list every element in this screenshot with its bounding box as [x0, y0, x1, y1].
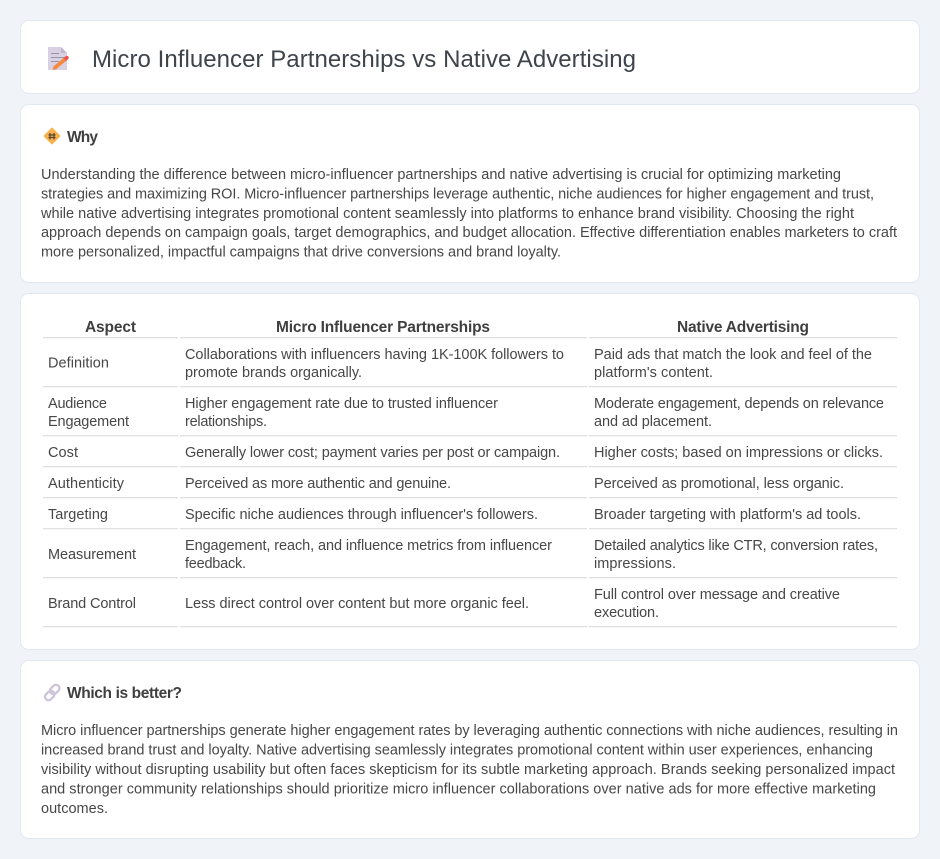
- text block: which is better paragraph: outcomes.: [41, 801, 108, 817]
- table row: brand control: Less direct control over content but more organic feel.: [185, 596, 529, 612]
- table row: definition: Definition: [48, 356, 109, 372]
- table row: cost: Higher costs; based on impressions or clicks.: [594, 445, 883, 461]
- table row: brand control: Brand Control: [48, 596, 136, 612]
- table row: audience engagement: and ad placement.: [594, 414, 712, 430]
- table row: definition: [43, 347, 897, 387]
- icon: diamond sign: [44, 128, 60, 144]
- table row: authenticity: [43, 476, 897, 498]
- table header row: Aspect: [85, 319, 136, 336]
- table header row: [43, 319, 897, 338]
- table row: audience engagement: Higher engagement rate due to trusted influencer: [185, 396, 498, 412]
- text block: why paragraph: more personalized, impactful campaigns that drive conversions and brand loyalty.: [41, 244, 561, 260]
- icon: chain link: [44, 683, 61, 702]
- panel: why: [20, 104, 920, 282]
- table row: authenticity: Perceived as promotional, less organic.: [594, 476, 844, 492]
- title: Micro Influencer Partnerships vs Native Advertising: [92, 46, 636, 73]
- panel: which is better: [20, 660, 920, 838]
- table row: targeting: Broader targeting with platform's ad tools.: [594, 507, 861, 523]
- table row: audience engagement: Audience: [48, 396, 107, 412]
- table row: definition: promote brands organically.: [185, 365, 362, 381]
- table row: authenticity: Perceived as more authentic and genuine.: [185, 476, 451, 492]
- table row: measurement: [43, 538, 897, 578]
- heading: which is better: Which is better?: [67, 685, 182, 702]
- heading: why: Why: [67, 129, 98, 146]
- table row: measurement: feedback.: [185, 556, 246, 572]
- table header row: Micro Influencer Partnerships: [276, 319, 490, 336]
- icon: document with pencil: [48, 47, 69, 70]
- text block: why paragraph: while native advertising integrates promotional content seamlessly into platforms to enhance brand visibility. Choosing the right: [40, 206, 854, 222]
- text block: why paragraph: approach depends on campaign goals, target demographics, and budget allocation. Effective differentiation enables marketers to craft: [41, 225, 897, 241]
- table row: cost: Cost: [48, 445, 78, 461]
- table row: audience engagement: [43, 396, 897, 436]
- panel: title header: [20, 20, 920, 94]
- table row: cost: Generally lower cost; payment varies per post or campaign.: [185, 445, 560, 461]
- table row: cost: [43, 445, 897, 467]
- table row: brand control: execution.: [594, 605, 659, 621]
- table row: targeting: Targeting: [48, 507, 108, 523]
- table row: targeting: Specific niche audiences through influencer's followers.: [185, 507, 538, 523]
- table row: measurement: Engagement, reach, and influence metrics from influencer: [185, 538, 552, 554]
- text block: why paragraph: strategies and maximizing ROI. Micro-influencer partnerships leverage authentic, niche audiences for higher engagement and trust,: [41, 186, 874, 202]
- table row: measurement: Detailed analytics like CTR, conversion rates,: [594, 538, 878, 554]
- table row: brand control: Full control over message and creative: [594, 587, 840, 603]
- table row: definition: platform's content.: [594, 365, 713, 381]
- table row: measurement: impressions.: [594, 556, 676, 572]
- text block: which is better paragraph: increased brand trust and loyalty. Native advertising seamlessly integrates promotional content within user experiences, enhancing: [41, 742, 873, 758]
- table row: definition: Paid ads that match the look and feel of the: [594, 347, 872, 363]
- table row: audience engagement: Moderate engagement, depends on relevance: [594, 396, 884, 412]
- panel: comparison table: [20, 294, 920, 650]
- table row: definition: Collaborations with influencers having 1K-100K followers to: [185, 347, 564, 363]
- table row: audience engagement: Engagement: [48, 414, 129, 430]
- table row: brand control: [43, 587, 897, 627]
- text block: which is better paragraph: and stronger community relationships should prioritize micro influencer collaborations over native ads for more effective marketing: [41, 782, 876, 798]
- table row: targeting: [43, 507, 897, 529]
- table row: audience engagement: relationships.: [185, 414, 267, 430]
- table row: measurement: Measurement: [48, 547, 136, 563]
- text block: why paragraph: Understanding the difference between micro-influencer partnerships and native advertising is crucial for optimizing marketing: [41, 167, 841, 183]
- table header row: Native Advertising: [677, 319, 809, 336]
- text block: which is better paragraph: [41, 723, 898, 817]
- table row: authenticity: Authenticity: [48, 476, 125, 492]
- text block: which is better paragraph: visibility without disrupting usability but often faces skepticism for its subtle marketing approach. Brands seeking personalized impact: [41, 762, 895, 778]
- text block: why paragraph: [40, 167, 897, 260]
- text block: which is better paragraph: Micro influencer partnerships generate higher engagement rates by leveraging authentic connections with niche audiences, resulting in: [41, 723, 898, 739]
